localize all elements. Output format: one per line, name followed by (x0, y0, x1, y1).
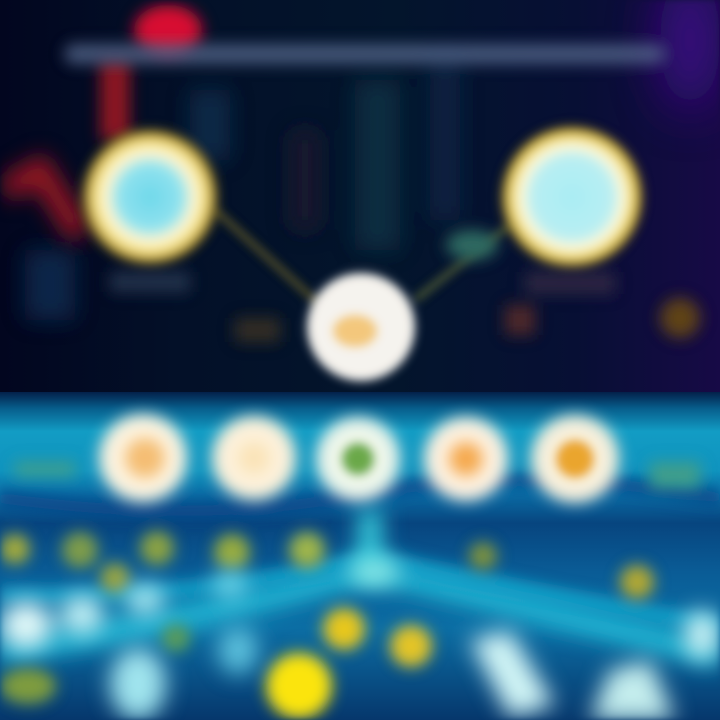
title bar (65, 44, 665, 64)
yellow data dots (0, 531, 654, 704)
node 3 (316, 417, 400, 501)
center node (307, 273, 415, 381)
red glow top (5, 5, 202, 235)
white light blocks (0, 559, 720, 720)
node 5 (531, 415, 619, 503)
bright yellow nodes (266, 608, 432, 719)
dark vertical data streaks (25, 60, 460, 320)
large node left (78, 125, 222, 269)
connector lines (215, 210, 510, 305)
green label blur (446, 230, 498, 260)
base background upper (0, 0, 720, 400)
node 2 (212, 416, 296, 500)
side green labels (15, 462, 700, 488)
node 1 (99, 414, 187, 502)
large node right (498, 123, 646, 271)
row of five icon nodes (99, 414, 619, 503)
caption blurs under large nodes (110, 272, 700, 342)
node 4 (424, 417, 508, 501)
flowing light bands (0, 481, 720, 655)
purple corner glow (660, 0, 720, 110)
base background lower (0, 392, 720, 720)
